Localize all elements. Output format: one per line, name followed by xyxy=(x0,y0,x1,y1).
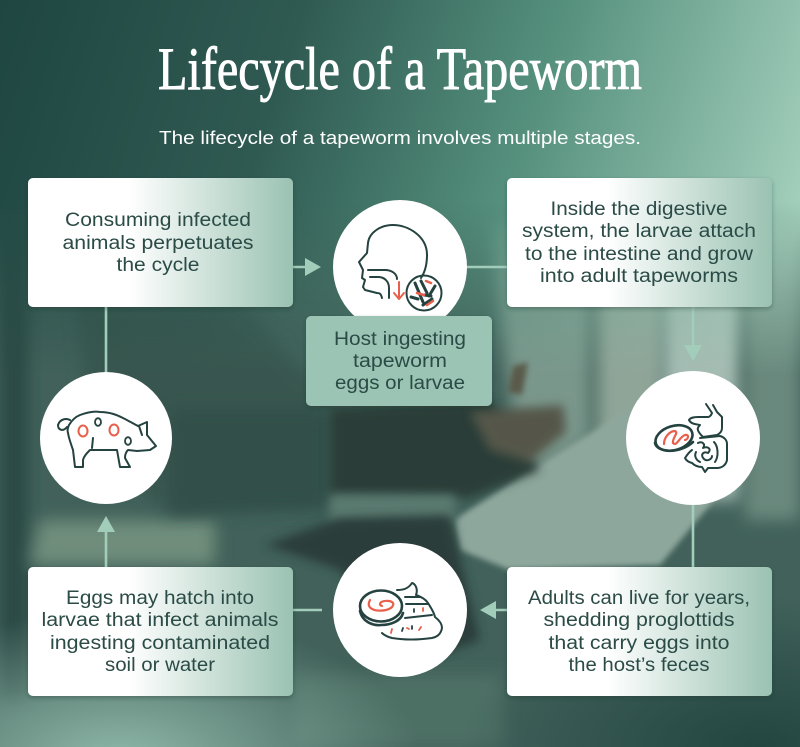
title: Lifecycle of a Tapeworm xyxy=(158,36,642,102)
panel: digestive system: into adult tapeworms xyxy=(540,266,738,287)
subtitle: The lifecycle of a tapeworm involves multiple stages. xyxy=(159,128,641,148)
arrow: consume to host xyxy=(293,258,321,276)
panel: digestive system: to the intestine and grow xyxy=(525,244,753,265)
connector: pig to consume card xyxy=(105,307,107,394)
arrow: digestive card to intestine xyxy=(684,307,702,361)
panel: eggs hatch into larvae: Eggs may hatch into xyxy=(66,588,254,609)
panel: digestive system xyxy=(507,178,772,307)
panel: adults shed proglottids: that carry eggs into xyxy=(548,633,730,654)
panel: host ingesting eggs: tapeworm xyxy=(353,351,447,372)
arrow: adults card to feces xyxy=(480,601,507,619)
icon: head ingesting larvae xyxy=(333,200,467,334)
panel: consuming infected animals: Consuming infected xyxy=(65,210,251,231)
panel: host ingesting eggs: eggs or larvae xyxy=(335,373,465,394)
arrow: eggs card to pig xyxy=(97,516,115,567)
icon: feces with tapeworm segment xyxy=(333,543,467,677)
panel: consuming infected animals: the cycle xyxy=(116,255,200,276)
panel: digestive system: Inside the digestive xyxy=(550,199,728,220)
panel: adults shed proglottids: shedding proglottids xyxy=(544,610,734,631)
panel: consuming infected animals xyxy=(28,178,293,307)
panel: eggs hatch into larvae: soil or water xyxy=(105,655,216,676)
panel: eggs hatch into larvae: ingesting contaminated xyxy=(50,633,270,654)
panel: host ingesting eggs xyxy=(306,316,492,406)
panel: adults shed proglottids xyxy=(507,567,772,696)
panel: consuming infected animals: animals perpetuates xyxy=(62,233,254,254)
panel: host ingesting eggs: Host ingesting xyxy=(334,329,466,350)
panel: eggs hatch into larvae: larvae that infect animals xyxy=(42,610,278,631)
panel: adults shed proglottids: Adults can live for years, xyxy=(528,588,750,609)
icon: intestine and tapeworm xyxy=(626,371,760,505)
connector: intestine to adults card xyxy=(692,505,694,567)
connector: feces to eggs card xyxy=(293,609,322,611)
panel: eggs hatch into larvae xyxy=(28,567,293,696)
panel: digestive system: system, the larvae attach xyxy=(522,221,756,242)
panel: adults shed proglottids: the host’s feces xyxy=(568,655,710,676)
connector: host to digestive card xyxy=(466,266,507,268)
icon: pig xyxy=(40,372,172,504)
